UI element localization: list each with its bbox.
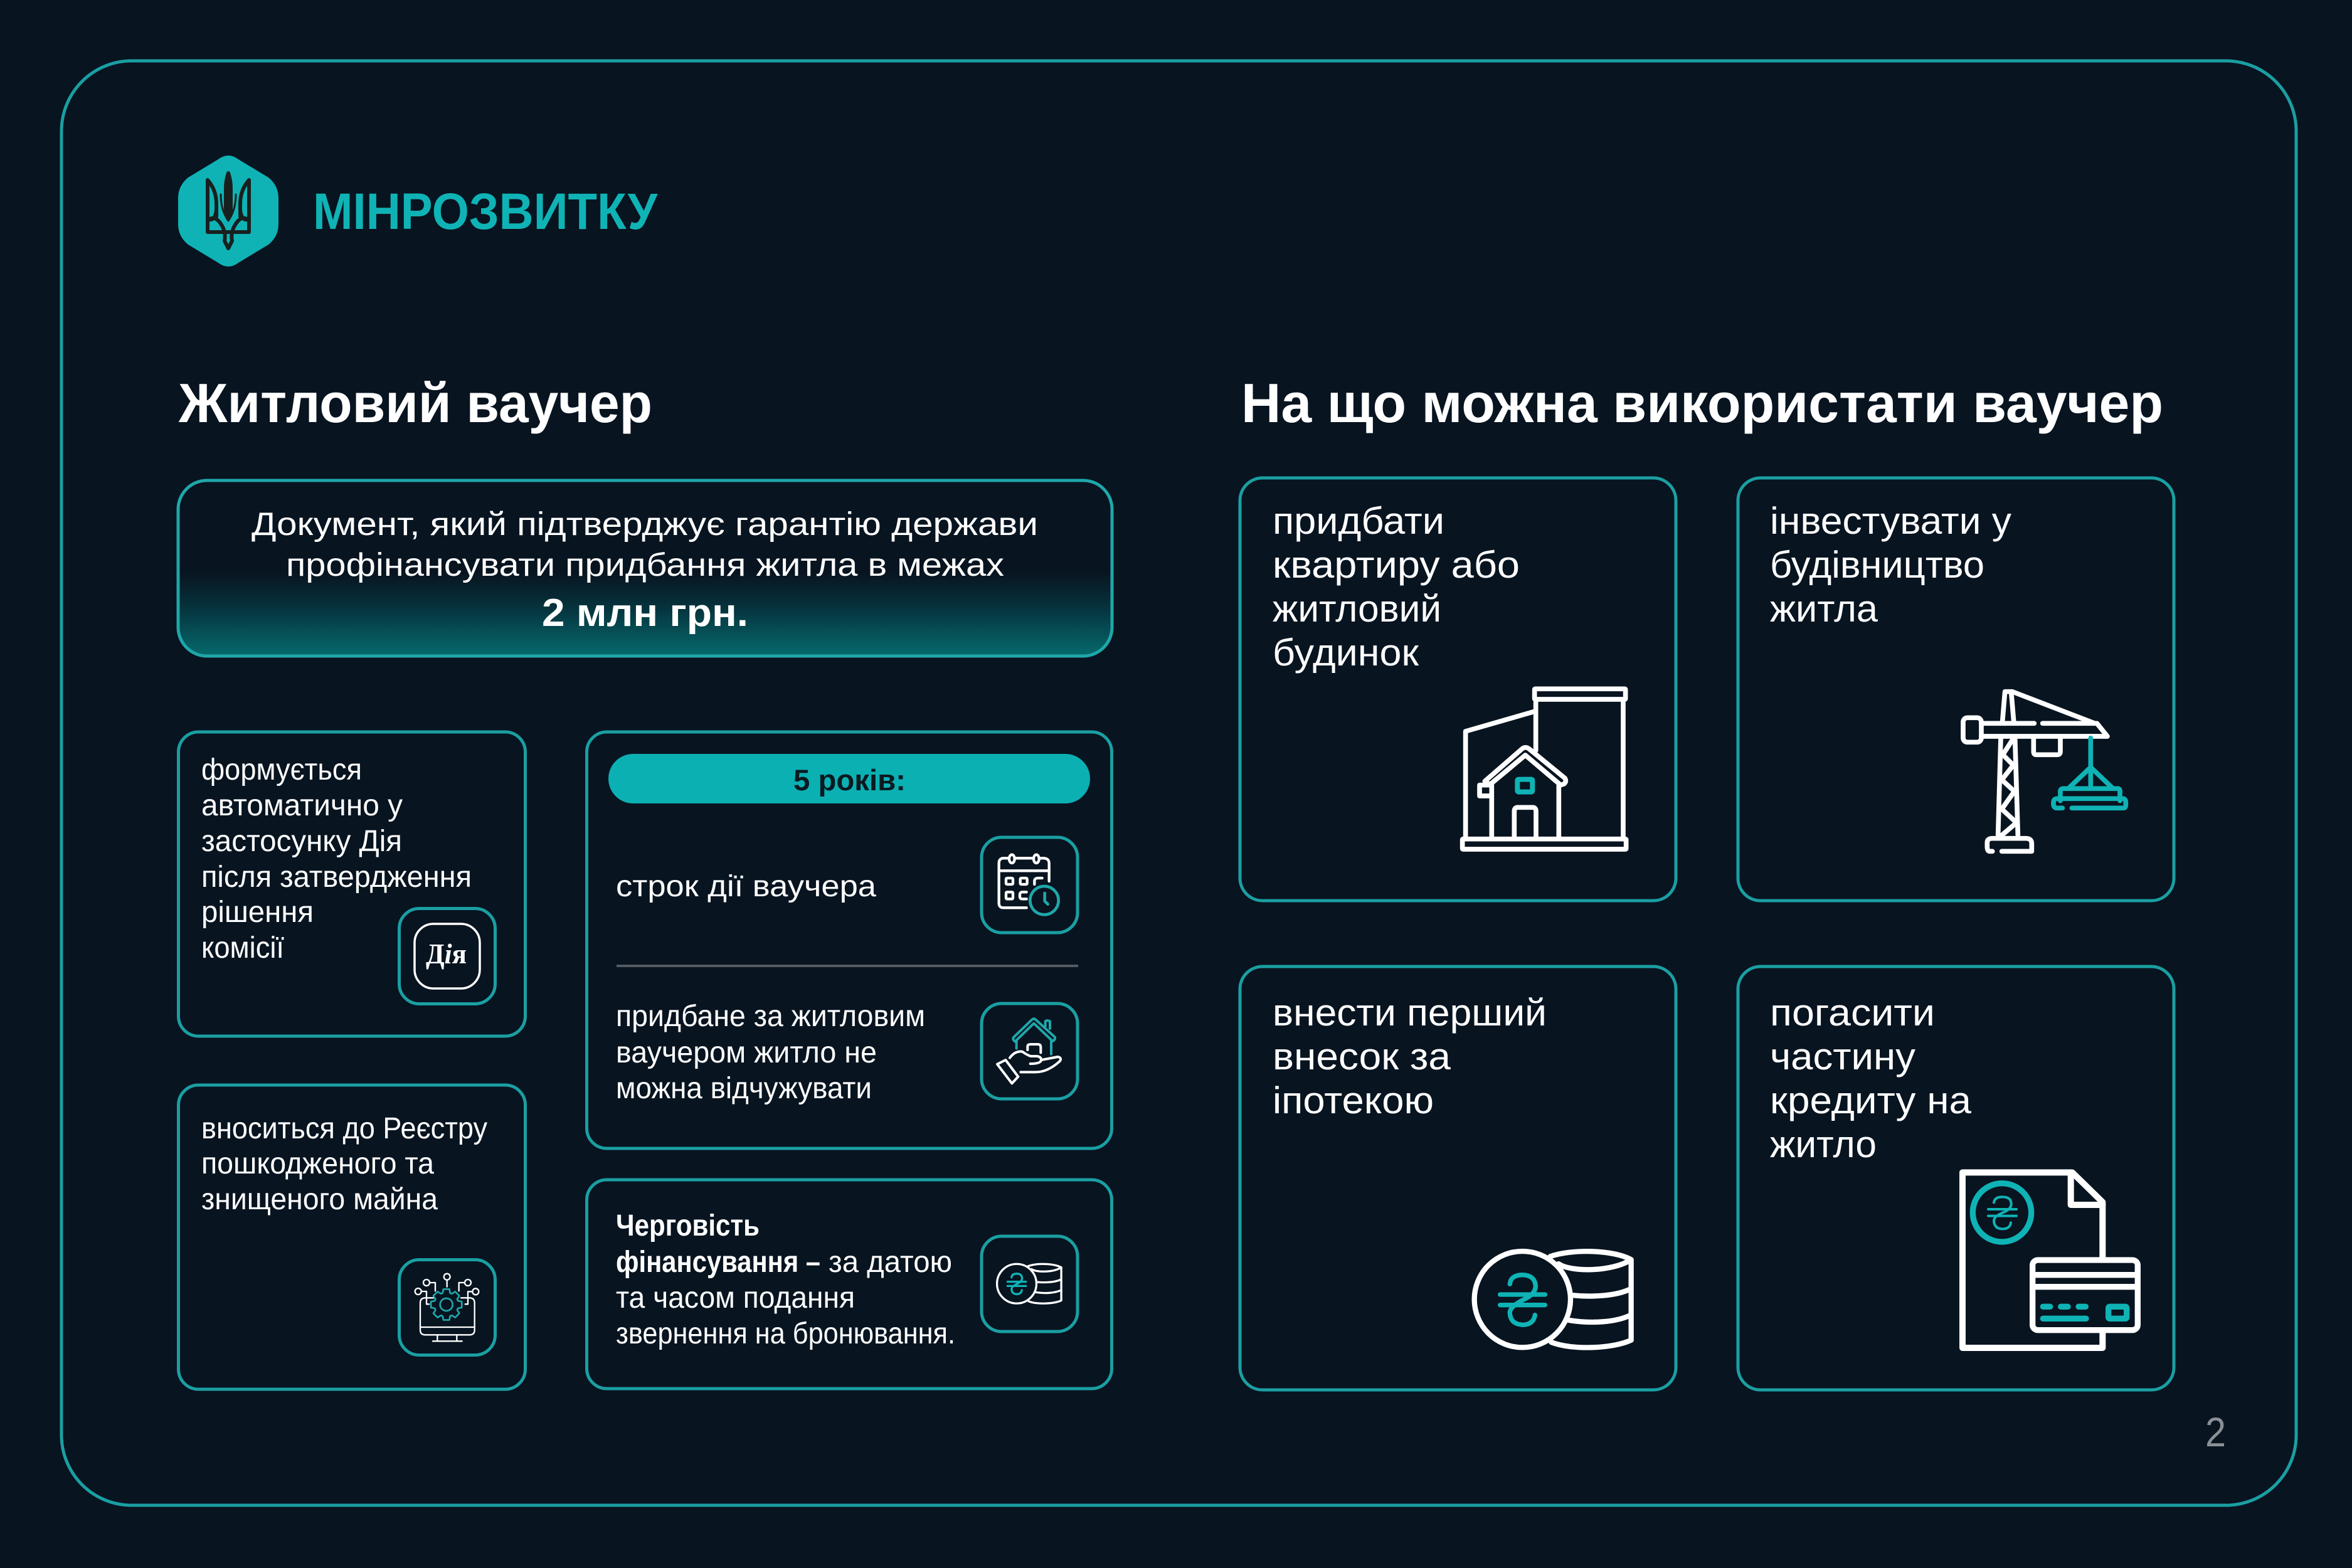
panel: financing order: [587, 1180, 1111, 1389]
text: financing order: за датою: [829, 1246, 952, 1279]
panel: formed in Diia: [178, 732, 526, 1036]
heading: right: На що можна використати ваучер: [1241, 372, 2163, 434]
text: no alienation: ваучером житло не: [616, 1036, 877, 1069]
text: repay loan: житло: [1770, 1123, 1877, 1165]
panel: repay loan: [1738, 967, 2174, 1390]
text: buy apartment: придбати: [1273, 500, 1444, 542]
panel: registry: [178, 1085, 526, 1389]
text: invest in construction: будівництво: [1770, 544, 1984, 586]
icon: coins small: [982, 1236, 1078, 1332]
logo trident: [208, 173, 249, 248]
pill: 5 years: [608, 754, 1090, 803]
divider: [617, 965, 1078, 967]
text: formed in Diia: формується: [201, 753, 362, 787]
icon: document and card: [1963, 1172, 2137, 1348]
icon: buildings: [1463, 689, 1626, 849]
text: down payment: іпотекою: [1273, 1079, 1434, 1121]
text: registry: вноситься до Реєстру: [201, 1112, 487, 1145]
text: formed in Diia: автоматично у: [201, 789, 403, 822]
heading: left: Житловий ваучер: [178, 372, 652, 434]
text: registry: [201, 1112, 487, 1216]
panel: buy apartment: [1240, 478, 1676, 901]
text: no alienation: придбане за житловим: [616, 1000, 925, 1033]
text: formed in Diia: застосунку Дія: [201, 825, 402, 858]
text: buy apartment: будинок: [1273, 632, 1419, 674]
pill: 5 years: 5 років:: [793, 763, 906, 797]
page number: 2: [2205, 1409, 2226, 1455]
logo: [178, 156, 658, 267]
text: no alienation: [616, 1000, 925, 1105]
text: buy apartment: [1273, 500, 1520, 674]
text: down payment: внести перший: [1273, 992, 1547, 1034]
text: repay loan: погасити: [1770, 992, 1935, 1034]
panel: down payment: [1240, 967, 1676, 1390]
icon: calendar: [982, 837, 1078, 933]
text: repay loan: частину: [1770, 1036, 1915, 1078]
text: voucher term: строк дії ваучера: [616, 870, 876, 903]
text: financing order: фінансування –: [616, 1246, 820, 1279]
text: financing order: Черговість: [616, 1209, 760, 1242]
icon: coins: [1475, 1251, 1631, 1347]
text: buy apartment: квартиру або: [1273, 544, 1520, 586]
icon: crane: [1963, 692, 2126, 851]
text: formed in Diia: комісії: [201, 931, 284, 965]
text: buy apartment: житловий: [1273, 588, 1441, 630]
text: registry: знищеного майна: [201, 1183, 438, 1216]
logo hexagon: [178, 156, 278, 267]
panel: voucher definition: [178, 480, 1112, 656]
definition text: [252, 506, 1038, 635]
icon: Diia: Дія: [426, 938, 467, 970]
text: financing order: [616, 1209, 955, 1350]
text: repay loan: кредиту на: [1770, 1079, 1972, 1121]
text: financing order: та часом подання: [616, 1281, 855, 1315]
text: down payment: [1273, 992, 1547, 1121]
icon: monitor with gear: [399, 1259, 495, 1355]
text: financing order: звернення на бронювання.: [616, 1317, 955, 1350]
text: invest in construction: інвестувати у: [1770, 500, 2011, 542]
panel: 5 years: [587, 732, 1111, 1148]
text: invest in construction: житла: [1770, 588, 1878, 630]
text: registry: пошкодженого та: [201, 1147, 434, 1180]
text: down payment: внесок за: [1273, 1036, 1451, 1078]
text: formed in Diia: рішення: [201, 896, 314, 929]
icon: house on hand: [982, 1004, 1078, 1099]
definition text: 2 млн грн.: [542, 591, 748, 635]
definition text: профінансувати придбання житла в межах: [286, 547, 1004, 583]
icon: Diia: [399, 908, 495, 1004]
text: no alienation: можна відчужувати: [616, 1072, 872, 1105]
panel: invest in construction: [1738, 478, 2174, 901]
text: repay loan: [1770, 992, 1972, 1165]
text: formed in Diia: [201, 753, 472, 965]
logo wordmark: МІНРОЗВИТКУ: [313, 183, 658, 240]
definition text: Документ, який підтверджує гарантію держави: [252, 506, 1038, 543]
text: formed in Diia: після затвердження: [201, 861, 472, 894]
text: invest in construction: [1770, 500, 2011, 630]
